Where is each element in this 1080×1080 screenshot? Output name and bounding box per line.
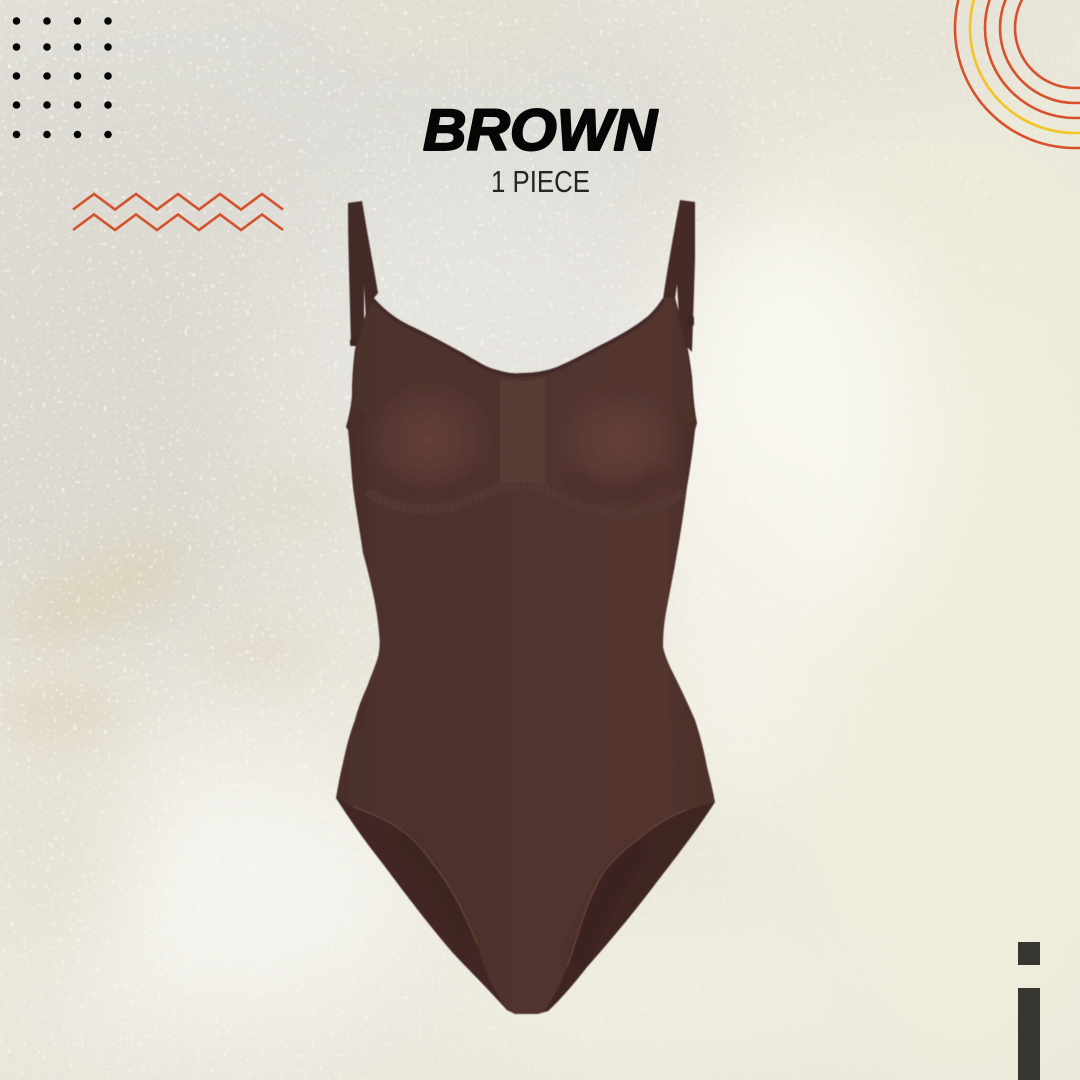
lining inner shadows [410, 844, 464, 934]
decorative concentric arcs, top right [955, 0, 1080, 148]
decorative orange zigzag lines [73, 194, 283, 230]
leg openings stitching [353, 807, 477, 943]
strap adjusters [350, 316, 694, 346]
cup lower shadows [392, 472, 480, 495]
product: brown bodysuit [330, 200, 725, 1014]
decorative dot grid [13, 17, 112, 138]
underbust knit band [368, 485, 683, 514]
bodysuit shell [336, 297, 715, 1014]
right strap [663, 200, 695, 352]
right cup highlight [573, 403, 660, 478]
side shading [348, 432, 354, 485]
title: BROWN: BROWN [423, 98, 658, 163]
left cup highlight [384, 402, 470, 480]
left leg lining [330, 798, 512, 1014]
neckline binding [373, 298, 663, 374]
subtitle: 1 PIECE: 1 PIECE [491, 164, 590, 199]
left strap [348, 201, 378, 346]
right leg lining [544, 802, 725, 1014]
centre mesh panel [500, 378, 546, 484]
brand mark: letter i block, bottom right [1018, 942, 1040, 1080]
armhole binding [675, 298, 697, 423]
